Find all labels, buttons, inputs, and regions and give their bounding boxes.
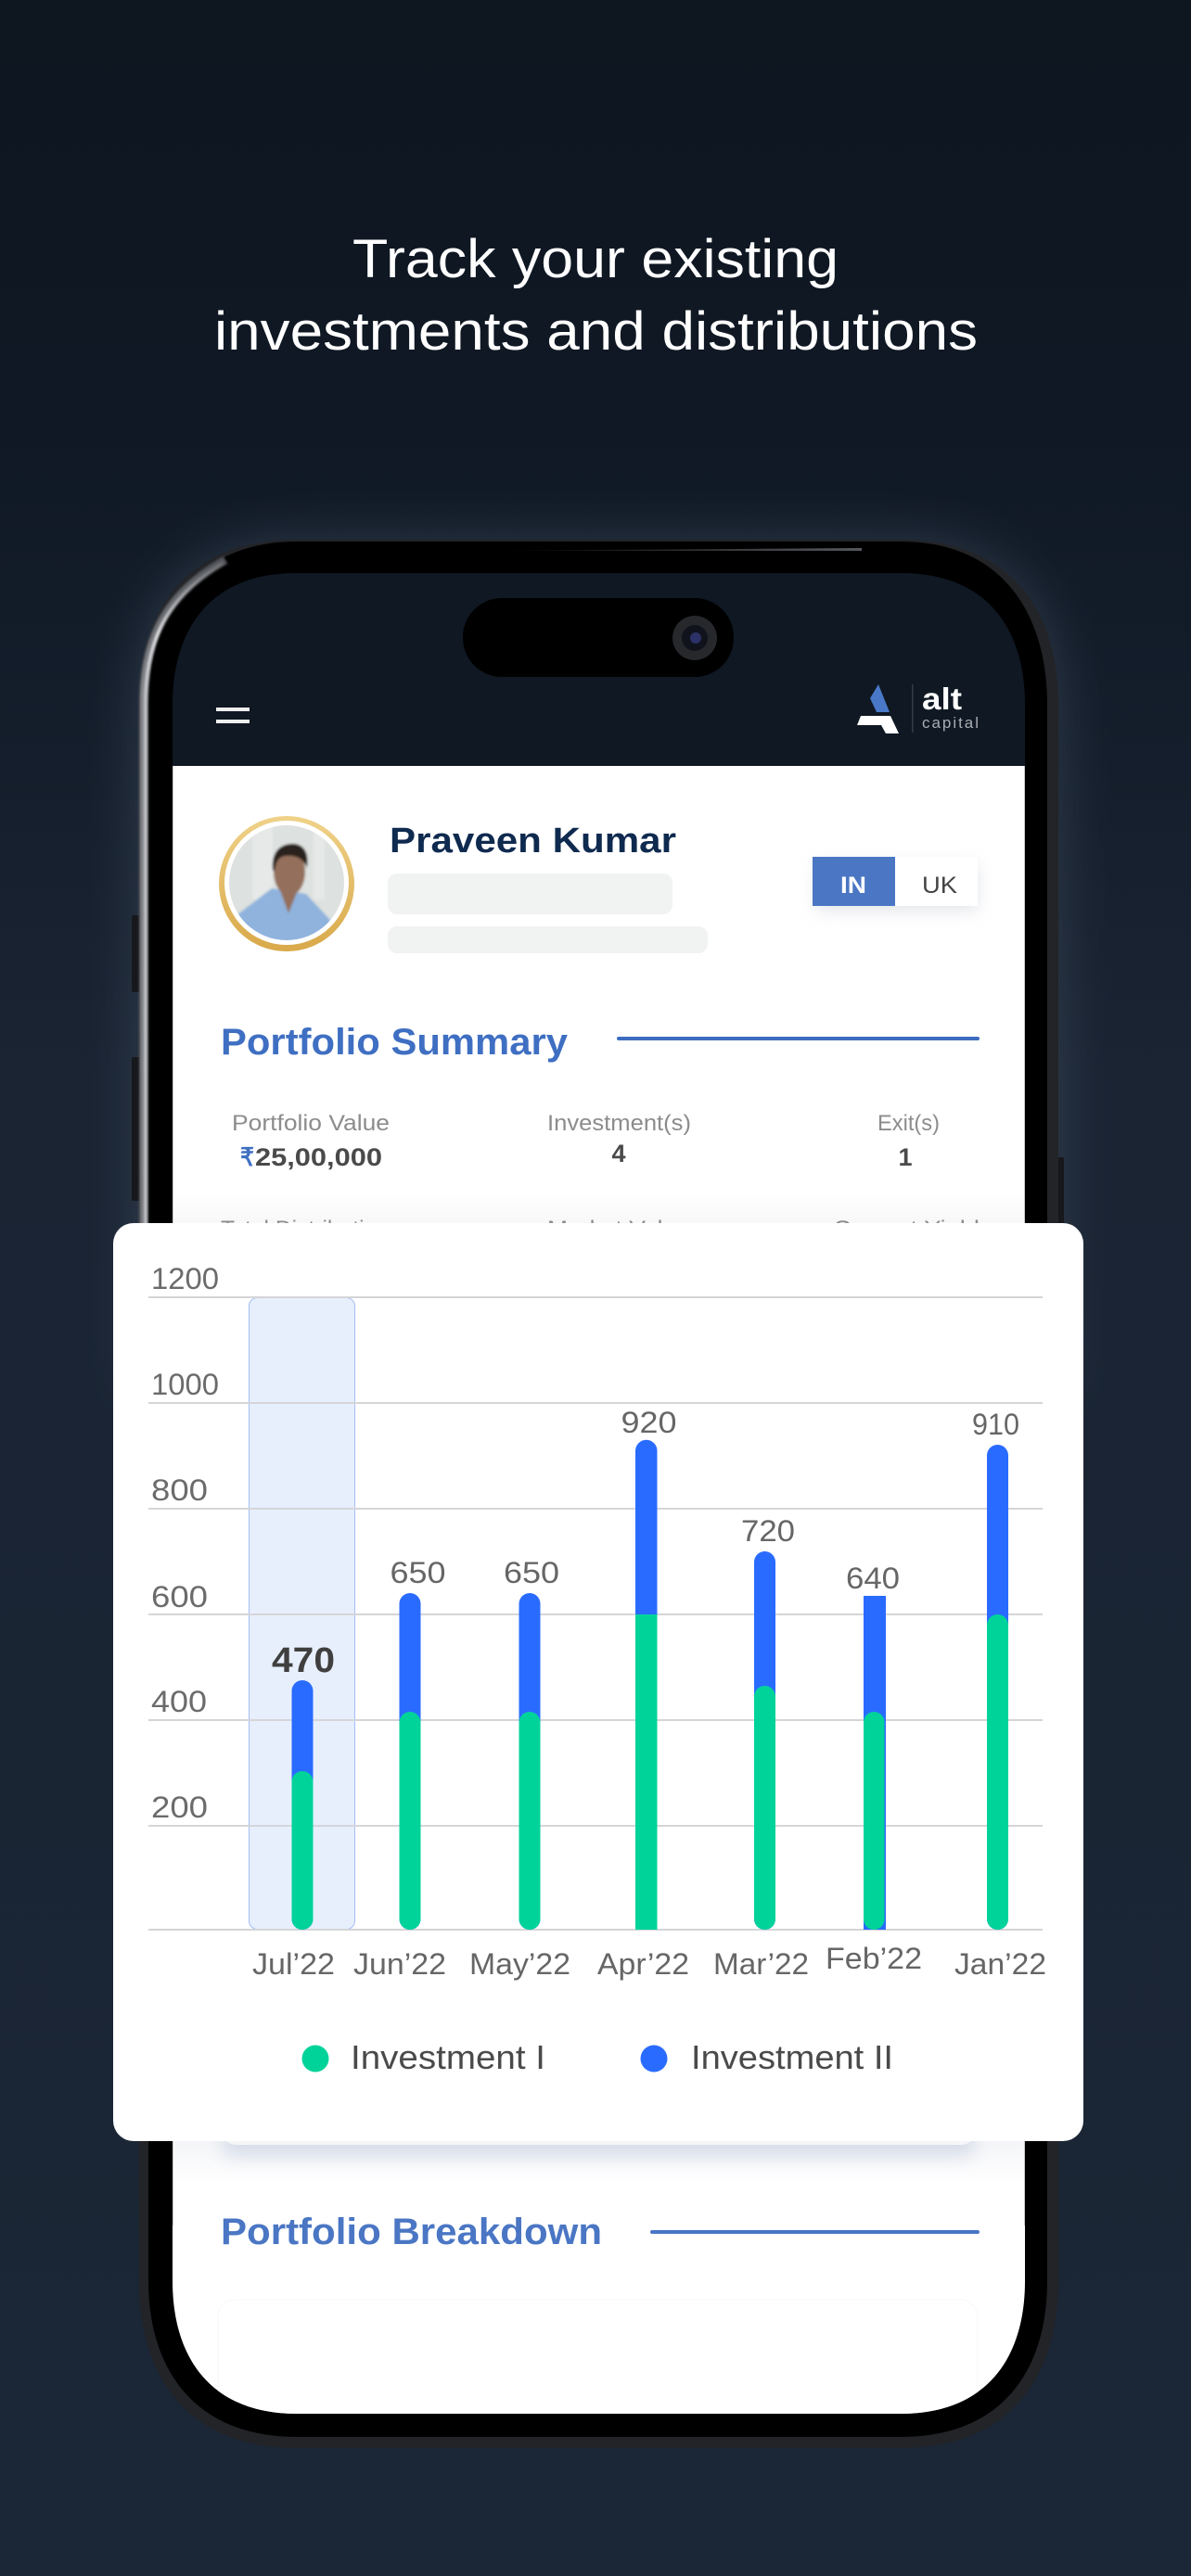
y axis labels [151,1262,219,1824]
dynamic island [463,598,734,677]
bar: May'22 [519,1593,540,1930]
phone frame [139,540,1058,2448]
fade above chart card [173,1193,1025,1231]
bar value labels: 640 [846,1562,900,1595]
phone bezel [148,542,1047,2437]
region toggle: IN [840,873,866,899]
stats row 2, clipped by chart card: Market Value [547,1217,690,1242]
stat: investments [547,1111,691,1167]
bar: Feb'22 [864,1596,886,1930]
x axis labels: Jun’22 [353,1947,446,1981]
bar value labels: 720 [741,1514,795,1548]
screen content background [173,766,1025,2426]
stat: exits: 1 [898,1143,913,1171]
hidden card under chart [226,2141,970,2145]
phone screen [173,573,1025,2467]
frame highlight left [144,560,225,1233]
x axis labels: Feb’22 [826,1942,922,1975]
bar value labels: 910 [972,1408,1019,1441]
glow behind phone [139,540,1058,1391]
title [214,229,978,362]
title: Track your existing [352,229,839,289]
bars [291,1440,1008,1930]
y axis labels: 400 [151,1685,207,1718]
region toggle [813,857,978,911]
stat: portfolio value: ₹ [240,1143,254,1171]
y axis labels: 800 [151,1473,208,1507]
stat: portfolio value: 25,00,000 [255,1143,382,1171]
y axis labels: 1200 [151,1262,219,1295]
logo: alt capital [857,682,979,733]
bar: Mar'22 [754,1551,775,1930]
stat: investments: 4 [611,1140,626,1167]
logo: alt capital: alt [922,682,962,716]
bar: Jan'22 [987,1445,1008,1930]
app header [173,573,1025,766]
column highlight [249,1298,354,1929]
heading: portfolio breakdown [221,2212,980,2252]
y axis labels: 600 [151,1580,208,1613]
bar value labels: 920 [621,1406,677,1439]
x axis labels: May’22 [469,1947,570,1981]
summary stats [221,1111,980,1242]
side buttons [132,915,1064,1241]
legend: investment II: Investment II [691,2038,893,2076]
stat: portfolio value [232,1111,390,1171]
bar value labels [272,1406,1019,1680]
avatar [219,816,354,951]
bar value labels: 650 [504,1556,559,1589]
redacted line 2 [388,926,708,953]
heading: portfolio breakdown: Portfolio Breakdown [221,2212,602,2252]
bar: Jun'22 [399,1593,421,1930]
heading: portfolio summary: Portfolio Summary [221,1022,569,1063]
grid lines [148,1296,1043,1931]
logo mark [857,684,899,733]
y axis labels: 200 [151,1791,208,1824]
stats row 2, clipped by chart card: Current Yield [833,1217,980,1242]
legend [302,2038,893,2076]
logo: alt capital: capital [922,714,979,732]
region toggle: UK [922,873,957,899]
chart card [113,1223,1083,2141]
fade below chart card [173,2141,1024,2151]
redacted line 1 [388,874,672,914]
stats row 2, clipped by chart card: Total Distribution [221,1217,390,1242]
x axis labels: Apr’22 [597,1947,689,1981]
portrait [229,825,344,940]
stat: exits [877,1111,940,1171]
bar value labels: 470 [272,1641,335,1680]
x axis labels [252,1942,1046,1981]
camera [672,616,717,660]
stat: exits: Exit(s) [877,1111,940,1136]
stats row 2, clipped by chart card [221,1217,980,1242]
stat: investments: Investment(s) [547,1111,691,1136]
x axis labels: Jul’22 [252,1947,335,1981]
portfolio breakdown card [217,2391,979,2414]
menu icon [216,708,250,723]
bar: Apr'22 [635,1440,657,1930]
bar value labels: 650 [390,1556,445,1589]
shadow of card under chart [219,2141,979,2162]
heading: portfolio summary [221,1022,980,1063]
legend: investment I: Investment I [351,2038,545,2076]
x axis labels: Mar’22 [713,1947,809,1981]
title: investments and distributions [214,301,978,362]
y axis labels: 1000 [151,1368,219,1401]
bar: Jul'22 [291,1680,314,1930]
stat: portfolio value: Portfolio Value [232,1111,390,1136]
phone mockup [132,540,1064,2467]
user name: Praveen Kumar [390,822,676,861]
x axis labels: Jan’22 [954,1947,1046,1981]
frame highlight top [480,548,862,551]
